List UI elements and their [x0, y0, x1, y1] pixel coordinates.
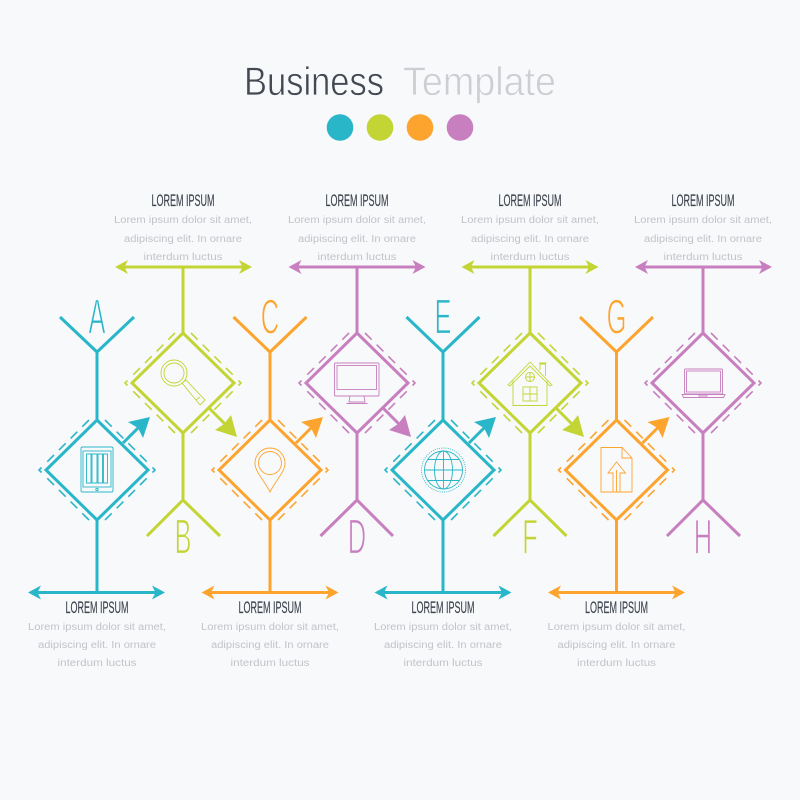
text block B: adipiscing elit. In ornare	[124, 234, 242, 245]
arrow F to G	[556, 408, 584, 437]
arrow B to C	[209, 408, 237, 437]
diamond E	[385, 420, 501, 520]
text block C: interdum luctus	[230, 658, 310, 669]
text block E: adipiscing elit. In ornare	[384, 640, 502, 651]
text block A: adipiscing elit. In ornare	[38, 640, 156, 651]
arrow A to B	[123, 417, 150, 443]
text block G: Lorem ipsum dolor sit amet,	[548, 622, 686, 633]
arrow D to E	[383, 408, 411, 437]
icon: monitor	[334, 363, 379, 404]
column D	[288, 260, 426, 565]
letter A: A	[89, 291, 105, 345]
title	[244, 60, 556, 104]
text block C	[201, 599, 339, 669]
top arrow D	[288, 260, 426, 274]
column G	[548, 291, 685, 600]
bottom arrow A	[28, 586, 165, 600]
text block A: LOREM IPSUM	[66, 599, 128, 617]
letter F: F	[522, 511, 538, 565]
diamond F	[472, 333, 588, 433]
text block G: adipiscing elit. In ornare	[558, 640, 676, 651]
arrow E to F	[469, 417, 496, 443]
text block H: Lorem ipsum dolor sit amet,	[634, 215, 772, 226]
text block H: interdum luctus	[664, 252, 742, 263]
text block E	[374, 599, 512, 669]
text block F: adipiscing elit. In ornare	[471, 234, 589, 245]
column A	[28, 291, 165, 600]
column H	[635, 260, 772, 565]
text block F	[461, 192, 599, 263]
diamond G	[558, 420, 674, 520]
text block G	[548, 599, 686, 669]
icon: tablet	[81, 447, 113, 492]
title: Business	[244, 60, 384, 104]
letter C: C	[261, 291, 279, 345]
text block E: LOREM IPSUM	[412, 599, 474, 617]
bottom arrow C	[202, 586, 338, 600]
text block F: Lorem ipsum dolor sit amet,	[461, 215, 599, 226]
top arrow H	[635, 260, 772, 274]
diamond C	[212, 420, 328, 520]
icon: map pin	[255, 448, 285, 492]
text block C: Lorem ipsum dolor sit amet,	[201, 622, 339, 633]
letter B: B	[175, 511, 191, 565]
text block G: LOREM IPSUM	[585, 599, 648, 617]
diamond H	[645, 333, 761, 433]
text block B: interdum luctus	[144, 252, 222, 263]
letter H: H	[694, 511, 712, 565]
diamond B	[125, 333, 241, 433]
text block H	[634, 192, 772, 263]
diamond A	[39, 420, 155, 520]
icon: magnifier	[161, 360, 205, 405]
text block D	[288, 192, 426, 263]
text block D: adipiscing elit. In ornare	[298, 234, 416, 245]
column C	[202, 291, 338, 600]
text block H: LOREM IPSUM	[672, 192, 734, 210]
icon: house	[508, 362, 552, 406]
arrow C to D	[296, 417, 323, 443]
top arrow F	[462, 260, 598, 274]
column F	[462, 260, 598, 565]
diamond D	[299, 333, 415, 433]
text block B: LOREM IPSUM	[152, 192, 214, 210]
icon: globe	[422, 448, 466, 492]
icon: document upload	[601, 448, 632, 492]
bottom arrow G	[548, 586, 685, 600]
letter D: D	[348, 511, 366, 565]
text block D: interdum luctus	[318, 252, 396, 263]
text block G: interdum luctus	[577, 658, 656, 669]
text block B	[114, 192, 252, 263]
text block F: LOREM IPSUM	[498, 192, 562, 210]
text block H: adipiscing elit. In ornare	[644, 234, 762, 245]
colour dots	[327, 114, 473, 141]
text block D: LOREM IPSUM	[326, 192, 388, 210]
text block C: LOREM IPSUM	[238, 599, 302, 617]
text block A: Lorem ipsum dolor sit amet,	[28, 622, 166, 633]
bottom arrow E	[374, 586, 512, 600]
text block C: adipiscing elit. In ornare	[211, 640, 329, 651]
text block D: Lorem ipsum dolor sit amet,	[288, 215, 426, 226]
text block E: interdum luctus	[404, 658, 482, 669]
letter E: E	[435, 291, 451, 345]
text block E: Lorem ipsum dolor sit amet,	[374, 622, 512, 633]
top arrow B	[115, 260, 252, 274]
arrow G to H	[642, 417, 670, 443]
column E	[374, 291, 512, 600]
title: Template	[403, 60, 556, 104]
column B	[115, 260, 252, 565]
text block F: interdum luctus	[490, 252, 570, 263]
text block B: Lorem ipsum dolor sit amet,	[114, 215, 252, 226]
text block A: interdum luctus	[58, 658, 136, 669]
text block A	[28, 599, 166, 669]
icon: laptop	[682, 369, 725, 398]
letter G: G	[607, 291, 626, 345]
